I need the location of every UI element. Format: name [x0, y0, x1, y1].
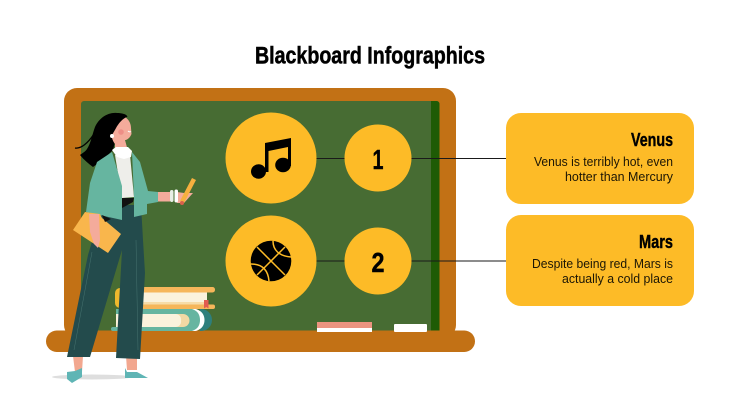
- connector lines: [316, 158, 506, 261]
- folder inner shadow: [102, 215, 111, 222]
- card text: Mars: actually a cold place: [562, 272, 673, 286]
- cheek and earring: [110, 129, 131, 138]
- hair fringe: [108, 113, 128, 135]
- hand over folder: [89, 214, 100, 248]
- card text: Mars: [532, 257, 673, 286]
- card text: Mars: Despite being red, Mars is: [532, 257, 673, 271]
- hair back: [80, 113, 118, 167]
- number circle 2: [344, 228, 412, 294]
- title: Blackboard Infographics: [255, 42, 485, 70]
- blackboard: [46, 88, 475, 352]
- shoes: [67, 368, 148, 383]
- number circle 2: 2: [372, 247, 384, 278]
- card: Venus: [506, 113, 694, 204]
- hair strand: [75, 134, 94, 148]
- chalk tray: [46, 330, 475, 352]
- card heading: Mars: Mars: [639, 232, 673, 252]
- board dark edge: [431, 101, 440, 333]
- white blouse: [115, 155, 134, 198]
- chalk in hand: [180, 178, 196, 205]
- folder: [73, 212, 121, 253]
- card heading: Venus: Venus: [631, 130, 673, 150]
- teacher illustration: [52, 113, 196, 383]
- card text: Venus: Venus is terribly hot, even: [534, 155, 673, 169]
- icon: music notes: [251, 138, 291, 179]
- icon circle: basketball: [226, 216, 316, 306]
- black top: [122, 198, 134, 208]
- teacher arm and hand: [158, 190, 193, 203]
- neck and face: [112, 116, 132, 151]
- floor shadow: [52, 374, 132, 380]
- cardigan: [86, 152, 158, 220]
- card text: Venus: hotter than Mercury: [565, 170, 674, 184]
- green board surface: [81, 101, 440, 333]
- chalk piece: [394, 324, 427, 332]
- icon circle: music: [226, 112, 316, 204]
- bottom book: [111, 309, 212, 331]
- board frame: [64, 88, 456, 338]
- card: Mars: [506, 215, 694, 306]
- top book: [115, 287, 215, 309]
- stack of books: [111, 287, 215, 331]
- eraser: [317, 322, 372, 332]
- icon: basketball: [251, 241, 291, 281]
- number circle 1: [344, 124, 412, 192]
- legs: [73, 356, 137, 372]
- number circle 1: 1: [372, 144, 384, 175]
- collar: [112, 147, 132, 159]
- card text: Venus: [534, 155, 674, 184]
- trousers: [67, 205, 145, 359]
